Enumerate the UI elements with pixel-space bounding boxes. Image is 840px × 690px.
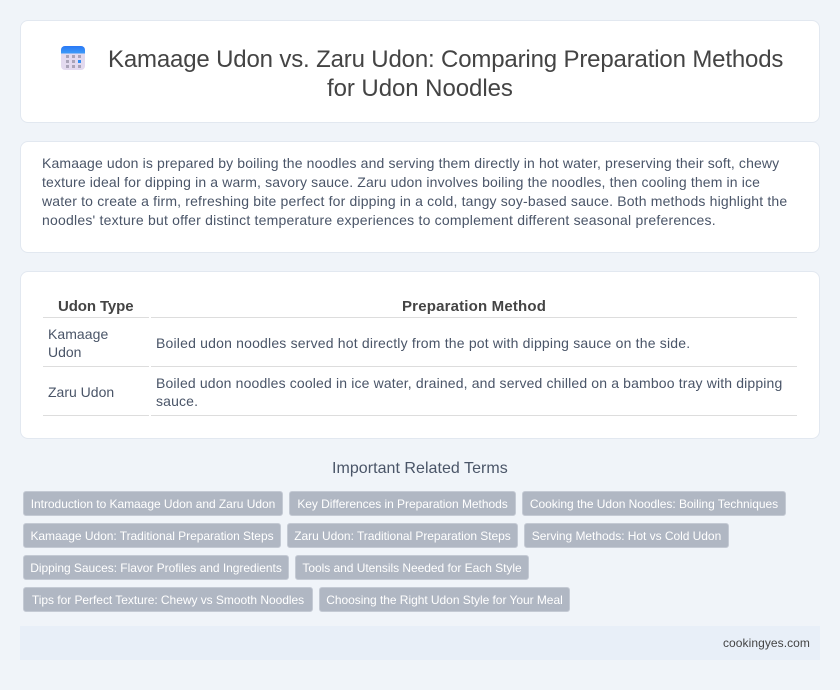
panel: comparison table [20,271,820,439]
text block: description: Kamaage udon is prepared by boiling the noodles and serving them directly in hot water, preserving their soft, chewy [42,155,779,171]
table row: Zaru Udon: sauce. [156,393,198,409]
table row: Zaru Udon: Zaru Udon [48,384,114,400]
text block: description: noodles' texture but offer distinct temperature experiences to complement different seasonal preferences. [42,212,716,228]
tag list: related terms: Serving Methods: Hot vs Cold Udon [532,529,721,543]
tag list: related terms: Tips for Perfect Texture: Chewy vs Smooth Noodles [32,593,304,607]
table header: Preparation Method: Preparation Method [402,298,546,315]
tag list: related terms: Kamaage Udon: Traditional Preparation Steps [30,529,274,543]
tag list: related terms: Cooking the Udon Noodles: Boiling Techniques [530,497,778,511]
tag list: related terms [23,491,786,612]
tag list: related terms: Dipping Sauces: Flavor Profiles and Ingredients [30,561,282,575]
title: for Udon Noodles [327,75,513,102]
table row: Zaru Udon [48,375,782,409]
tag list: related terms: Zaru Udon: Traditional Preparation Steps [294,529,511,543]
tag list: related terms: Choosing the Right Udon Style for Your Meal [326,593,563,607]
text block: description: texture ideal for dipping in a warm, savory sauce. Zaru udon involves boiling the noodles, then cooling them in ice [42,174,760,190]
heading: related terms: Important Related Terms [332,460,508,477]
footer [20,626,820,660]
title [108,46,783,102]
tag list: related terms: Tools and Utensils Needed for Each Style [302,561,522,575]
text block: description: water to create a firm, refreshing bite perfect for dipping in a cold, tangy soy-based sauce. Both methods highlight the [42,193,787,209]
table row: Kamaage Udon: Kamaage [48,326,108,342]
panel: description [20,141,820,253]
table row: Zaru Udon: Boiled udon noodles cooled in ice water, drained, and served chilled on a bamboo tray with dipping [156,375,782,391]
text block: description [42,155,787,228]
table row: Kamaage Udon [48,326,690,360]
header card [20,20,820,123]
footer source text: cookingyes.com [723,636,810,650]
title: Kamaage Udon vs. Zaru Udon: Comparing Preparation Methods [108,46,783,73]
table header: Udon Type: Udon Type [58,298,133,315]
icon: calendar [61,46,85,70]
tag list: related terms: Key Differences in Preparation Methods [297,497,508,511]
tag list: related terms: Introduction to Kamaage Udon and Zaru Udon [31,497,275,511]
table row: Kamaage Udon: Udon [48,344,81,360]
table row: Kamaage Udon: Boiled udon noodles served hot directly from the pot with dipping sauce on the side. [156,335,690,351]
